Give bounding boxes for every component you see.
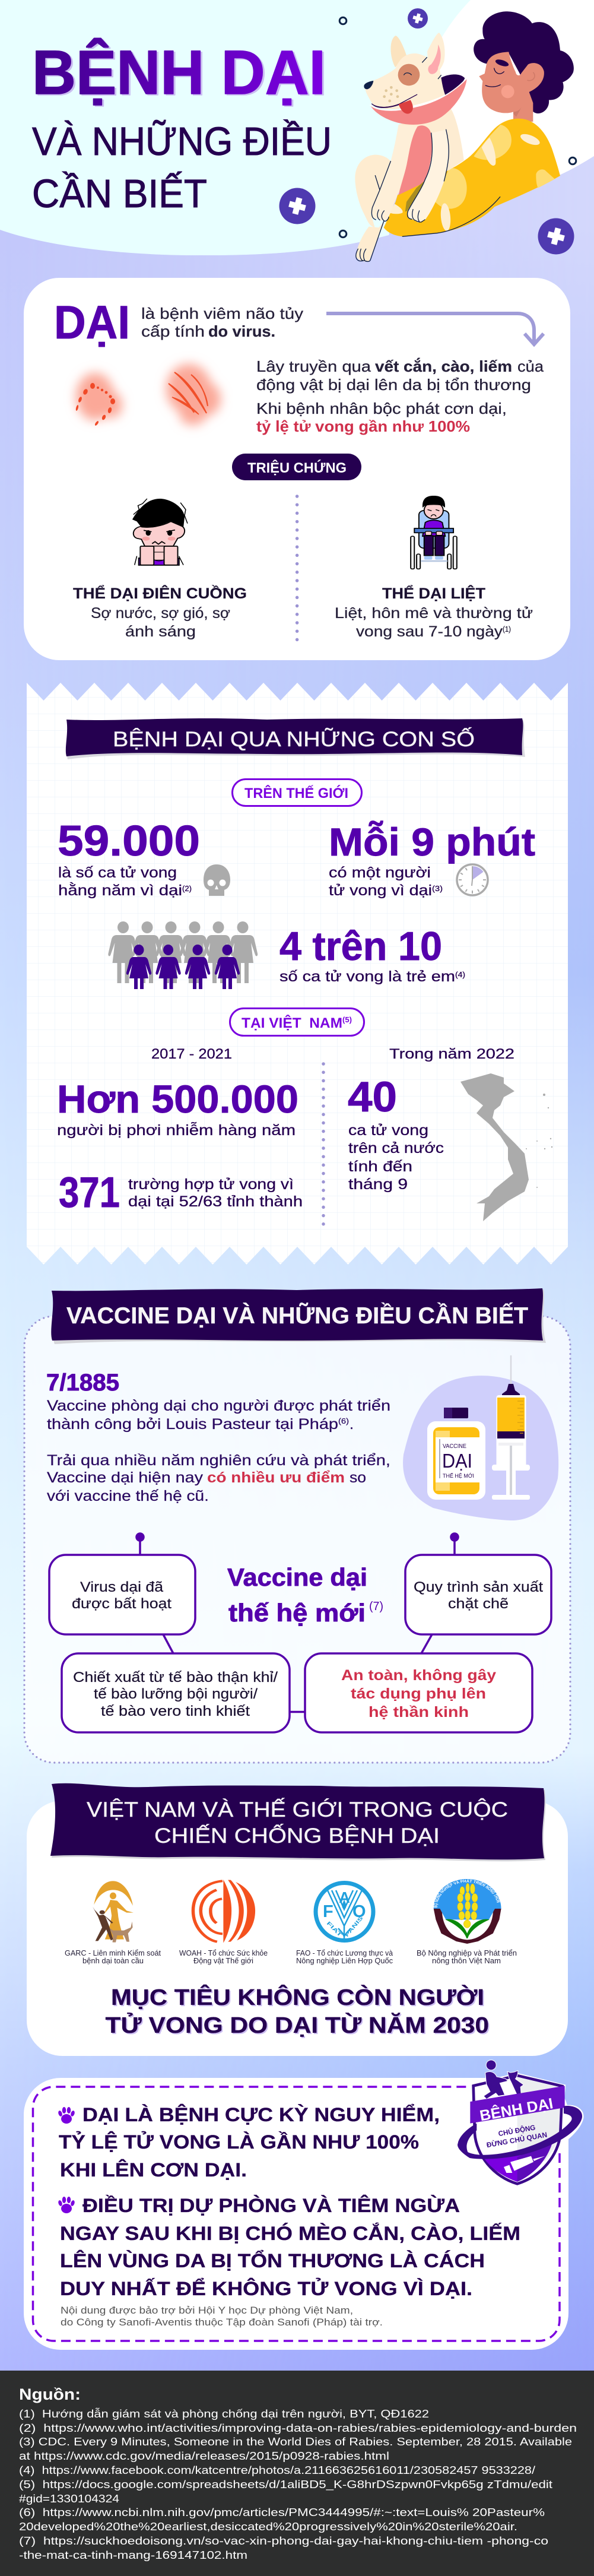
text block: furious form: THỂ DẠI ĐIÊN CUỒNG: [73, 584, 247, 602]
logo: WOAH: [193, 1880, 255, 1943]
captions: organization names: Bộ Nông nghiệp và Phát triển: [417, 1949, 517, 1957]
banner heading: BỆNH DẠI QUA NHỮNG CON SỐ: [113, 727, 475, 751]
heading: 2030 goal: [106, 1984, 489, 2038]
badge: rabies shield: BỆNH DẠI: [478, 2094, 554, 2124]
text block: paralytic form: vong sau 7-10 ngày: [356, 623, 503, 640]
box: strict production: [405, 1555, 551, 1634]
footer: sources: Nguồn:: [19, 2385, 81, 2403]
logo: FAO: O: [352, 1902, 366, 1921]
person and dog: [484, 2060, 523, 2099]
stat: 40 deaths in 2022: 40: [348, 1074, 397, 1121]
text block: sponsorship note: Nội dung được bảo trợ bởi Hội Y học Dự phòng Việt Nam,: [61, 2305, 353, 2316]
icon: bite wound: [75, 373, 122, 426]
connectors: [136, 1533, 458, 1712]
captions: organization names: Nông nghiệp Liên Hợp Quốc: [296, 1957, 393, 1965]
icon: skull: [204, 864, 230, 896]
text block: prevention: DUY NHẤT ĐỂ KHÔNG TỬ VONG VÌ DẠI.: [60, 2278, 472, 2299]
box: cell extraction: tế bào vero tinh khiết: [101, 1703, 250, 1719]
source list: (6) https://www.ncbi.nlm.nih.gov/pmc/articles/PMC3444995/#:~:text=Louis% 20Pasteur%: [19, 2506, 545, 2518]
box: inactivated virus: [49, 1555, 195, 1634]
source list: 20developed%20the%20earliest,desiccated%20progressively%20in%20sterile%20air.: [19, 2520, 517, 2533]
text block: prevention: [60, 2195, 520, 2299]
logo: FAO: A: [339, 1889, 350, 1906]
text block: vaccine history: (6): [338, 1417, 349, 1425]
heading pill: symptoms: TRIỆU CHỨNG: [247, 460, 347, 476]
heading: period 2017-2021: 2017 - 2021: [151, 1046, 232, 1062]
stat: 59.000 deaths: [58, 818, 200, 899]
text block: rabies danger: TỶ LỆ TỬ VONG LÀ GẦN NHƯ 100%: [59, 2131, 419, 2153]
text block: prevention: ĐIỀU TRỊ DỰ PHÒNG VÀ TIÊM NGỪA: [82, 2195, 460, 2216]
banner heading: [50, 1783, 546, 1861]
heading: year 2022: Trong năm 2022: [389, 1046, 514, 1062]
text block: furious form: ánh sáng: [125, 623, 196, 640]
logo: GARC: [93, 1881, 134, 1943]
stat: 59.000 deaths: 59.000: [58, 818, 200, 865]
text block: vaccine history: Vaccine dại hiện nay: [47, 1469, 204, 1486]
map: Vietnam: [460, 1073, 552, 1221]
stat: 4 of 10 children: (4): [455, 970, 465, 979]
text block: transmission: [256, 357, 544, 435]
text block: definition: [141, 305, 303, 340]
stat: 371 deaths: [59, 1169, 303, 1216]
text block: vaccine history: so: [350, 1469, 366, 1486]
text block: vaccine history: .: [350, 1416, 354, 1433]
banner heading: CHIẾN CHỐNG BỆNH DẠI: [154, 1824, 440, 1848]
stat: over 500,000 exposed: [57, 1077, 298, 1139]
logo: FAO: F: [323, 1902, 333, 1921]
logo: Ministry of Agriculture: BỘ NÔNG NGHIỆP VÀ PHÁT TRIỂN NÔNG THÔN: [433, 1879, 501, 1908]
pill: in Vietnam: TẠI VIỆT NAM: [242, 1015, 342, 1031]
text block: definition: do virus.: [208, 322, 275, 340]
source list: at https://www.cdc.gov/media/releases/2015/p0928-rabies.html: [19, 2450, 389, 2462]
stat: 371 deaths: trường hợp tử vong vì: [128, 1176, 294, 1193]
illustration: person hugging dog: [355, 11, 574, 262]
decorative rings: [339, 17, 576, 237]
source list: #gid=1330104324: [19, 2492, 119, 2505]
stat: 40 deaths in 2022: ca tử vong: [348, 1122, 428, 1139]
icon: clock: [457, 864, 488, 895]
panel: vaccine: [24, 1288, 570, 1763]
panel: global fight: [27, 1783, 568, 2056]
box: safety: [305, 1653, 532, 1732]
box: cell extraction: tế bào lưỡng bội người/: [94, 1686, 258, 1702]
text block: transmission: tỷ lệ tử vong gần như 100%: [256, 417, 470, 435]
text block: transmission: Lây truyền qua: [256, 357, 371, 375]
text block: furious form: [73, 584, 247, 640]
text block: rabies danger: DẠI LÀ BỆNH CỰC KỲ NGUY HIỂM,: [82, 2104, 440, 2125]
text block: vaccine history: 7/1885: [46, 1370, 119, 1396]
icon: large plus badge left: [279, 188, 316, 224]
icon: large plus badge right: [538, 218, 574, 254]
text block: sponsorship note: [61, 2305, 383, 2328]
icon: scratch wound: [166, 364, 221, 425]
logo: FAO: [316, 1883, 373, 1941]
text block: prevention: LÊN VÙNG DA BỊ TỔN THƯƠNG LÀ CÁCH: [60, 2250, 485, 2271]
title: CẦN BIẾT: [32, 172, 207, 216]
captions: organization names: GARC - Liên minh Kiểm soát: [65, 1949, 161, 1957]
stat: 371 deaths: 371: [59, 1169, 120, 1216]
hero background: [0, 0, 594, 279]
logo: Ministry of Agriculture: [433, 1879, 501, 1944]
stat: 59.000 deaths: (2): [182, 884, 192, 893]
text block: definition: cấp tính: [141, 322, 205, 340]
pill: worldwide: TRÊN THẾ GIỚI: [244, 785, 348, 801]
source list: (7) https://suckhoedoisong.vn/so-vac-xin-phong-dai-gay-hai-khong-chiu-tiem -phong-co: [19, 2534, 548, 2547]
pictogram: 4 of 10 people: [108, 921, 258, 989]
title: [32, 37, 332, 216]
pill: in Vietnam: (5): [342, 1015, 352, 1024]
heading: new-generation vaccine: [227, 1563, 383, 1627]
badge: rabies shield: CHỦ ĐỘNG: [497, 2122, 536, 2138]
source list: -the-mat-ca-tinh-mang-169147102.htm: [19, 2549, 247, 2561]
text block: definition: là bệnh viêm não tủy: [141, 305, 303, 322]
source list: (4) https://www.facebook.com/katcentre/photos/a.211663625616011/230582457 9533228/: [19, 2464, 536, 2476]
pill: worldwide: [233, 779, 362, 806]
heading: 2030 goal: MỤC TIÊU KHÔNG CÒN NGƯỜI: [111, 1984, 484, 2010]
text block: sponsorship note: do Công ty Sanofi-Aventis thuộc Tập đoàn Sanofi (Pháp) tài trợ.: [61, 2317, 383, 2328]
panel: key messages: [24, 2078, 568, 2350]
captions: organization names: WOAH - Tổ chức Sức khỏe: [179, 1949, 268, 1957]
text block: transmission: Khi bệnh nhân bộc phát cơn dại,: [256, 400, 507, 417]
stat: over 500,000 exposed: người bị phơi nhiễm hàng năm: [57, 1121, 296, 1139]
box: safety: hệ thần kinh: [369, 1704, 469, 1720]
box: safety: An toàn, không gây: [341, 1667, 496, 1684]
diagram: new-generation vaccine: [49, 1533, 551, 1732]
text block: transmission: của: [517, 357, 544, 375]
illustration: vaccine vial and syringe: DẠI: [442, 1450, 472, 1472]
box: cell extraction: Chiết xuất từ tế bào thận khỉ/: [73, 1669, 278, 1685]
pill: in Vietnam: [230, 1008, 364, 1035]
panel: definition and symptoms: [24, 278, 570, 660]
icon: paw: [58, 2197, 75, 2213]
text block: vaccine history: [46, 1370, 390, 1504]
heading: new-generation vaccine: thế hệ mới: [228, 1599, 366, 1627]
stat: 40 deaths in 2022: trên cả nước: [348, 1140, 444, 1156]
box: strict production: Quy trình sản xuất: [414, 1579, 543, 1595]
logo: FAO: PANIS: [344, 1915, 364, 1938]
stat: 59.000 deaths: hằng năm vì dại: [58, 882, 182, 899]
stat: every 9 minutes: [329, 820, 535, 899]
text block: paralytic form: [335, 584, 533, 640]
icon: small plus badge: [408, 8, 428, 28]
text block: vaccine history: có nhiều ưu điểm: [207, 1469, 345, 1486]
panel: rabies in numbers: [27, 683, 568, 1265]
source list: (2) https://www.who.int/activities/improving-data-on-rabies/rabies-epidemiology-and-burden: [19, 2422, 577, 2434]
text block: prevention: NGAY SAU KHI BỊ CHÓ MÈO CẮN, CÀO, LIẾM: [60, 2223, 520, 2244]
banner heading: VIỆT NAM VÀ THẾ GIỚI TRONG CUỘC: [87, 1798, 508, 1821]
source list: (5) https://docs.google.com/spreadsheets/d/1aliBD5_K-G8hrDSzpwn0Fvkp65g zTdmu/edit: [19, 2478, 552, 2491]
stat: over 500,000 exposed: Hơn 500.000: [57, 1077, 298, 1121]
text block: transmission: động vật bị dại lên da bị tổn thương: [256, 376, 531, 394]
stat: 59.000 deaths: là số ca tử vong: [58, 864, 177, 881]
stat: every 9 minutes: tử vong vì dại: [329, 882, 432, 899]
heading: DẠI: DẠI: [54, 296, 130, 348]
stat: 371 deaths: dại tại 52/63 tỉnh thành: [128, 1193, 303, 1210]
badge: rabies shield: [456, 2060, 584, 2187]
footer: sources: [0, 2371, 594, 2576]
stat: every 9 minutes: Mỗi 9 phút: [329, 820, 535, 864]
box: cell extraction: [62, 1653, 290, 1732]
source list: [19, 2407, 577, 2561]
source list: (3) CDC. Every 9 Minutes, Someone in the World Dies of Rabies. September, 28 2015. Available: [19, 2435, 572, 2448]
stat: 4 of 10 children: số ca tử vong là trẻ em: [279, 968, 455, 985]
text block: vaccine history: với vaccine thế hệ cũ.: [47, 1488, 209, 1504]
heading pill: symptoms: [232, 454, 361, 480]
captions: organization names: FAO - Tổ chức Lương thực và: [296, 1949, 393, 1957]
text block: vaccine history: Vaccine phòng dại cho người được phát triển: [47, 1398, 390, 1414]
heading: 2030 goal: TỬ VONG DO DẠI TỪ NĂM 2030: [106, 2012, 489, 2038]
stat: 40 deaths in 2022: tháng 9: [348, 1176, 408, 1193]
icon: furious rabies person: [132, 499, 188, 565]
box: inactivated virus: được bất hoạt: [72, 1596, 171, 1612]
box: inactivated virus: Virus dại đã: [80, 1579, 164, 1595]
badge: rabies shield: ĐỪNG CHỦ QUAN: [486, 2130, 548, 2149]
stat: 40 deaths in 2022: [348, 1074, 444, 1193]
illustration: vaccine vial and syringe: VACCINE: [443, 1443, 466, 1450]
stat: 40 deaths in 2022: tính đến: [348, 1158, 412, 1175]
banner heading: VACCINE DẠI VÀ NHỮNG ĐIỀU CẦN BIẾT: [66, 1303, 528, 1329]
text block: vaccine history: Trải qua nhiều năm nghiên cứu và phát triển,: [47, 1452, 390, 1469]
logo: FAO: FIAT: [326, 1920, 344, 1938]
text block: vaccine history: thành công bởi Louis Pasteur tại Pháp: [47, 1416, 338, 1433]
text block: furious form: Sợ nước, sợ gió, sợ: [91, 605, 230, 622]
box: strict production: chặt chẽ: [448, 1596, 509, 1612]
banner heading: [51, 1288, 546, 1344]
illustration: vaccine vial and syringe: [403, 1355, 558, 1520]
icon: paralyzed person in wheelchair: [411, 496, 457, 569]
title: VÀ NHỮNG ĐIỀU: [32, 119, 332, 164]
captions: organization names: bệnh dại toàn cầu: [82, 1957, 144, 1965]
stat: every 9 minutes: (3): [432, 884, 443, 893]
box: safety: tác dụng phụ lên: [351, 1685, 486, 1702]
illustration: vaccine vial and syringe: THẾ HỆ MỚI: [443, 1473, 474, 1479]
text block: rabies danger: KHI LÊN CƠN DẠI.: [60, 2159, 247, 2181]
title: BỆNH DẠI: [32, 37, 326, 107]
heading: new-generation vaccine: (7): [369, 1600, 383, 1613]
stat: every 9 minutes: có một người: [329, 864, 431, 881]
arrow: [326, 313, 544, 344]
heading: new-generation vaccine: Vaccine dại: [227, 1563, 367, 1591]
text block: paralytic form: Liệt, hôn mê và thường tử: [335, 605, 533, 622]
stat: 4 of 10 children: [279, 924, 465, 985]
icon: paw: [58, 2107, 75, 2124]
text block: transmission: vết cắn, cào, liếm: [375, 357, 512, 375]
source list: (1) Hướng dẫn giám sát và phòng chống dại trên người, BYT, QĐ1622: [19, 2407, 429, 2420]
text block: paralytic form: THỂ DẠI LIỆT: [382, 584, 485, 602]
captions: organization names: [65, 1949, 517, 1965]
captions: organization names: Động vật Thế giới: [193, 1957, 253, 1965]
banner heading: [66, 718, 525, 759]
stat: 4 of 10 children: 4 trên 10: [279, 924, 442, 969]
captions: organization names: nông thôn Việt Nam: [432, 1957, 501, 1965]
text block: rabies danger: [59, 2104, 440, 2181]
text block: paralytic form: (1): [503, 625, 511, 633]
